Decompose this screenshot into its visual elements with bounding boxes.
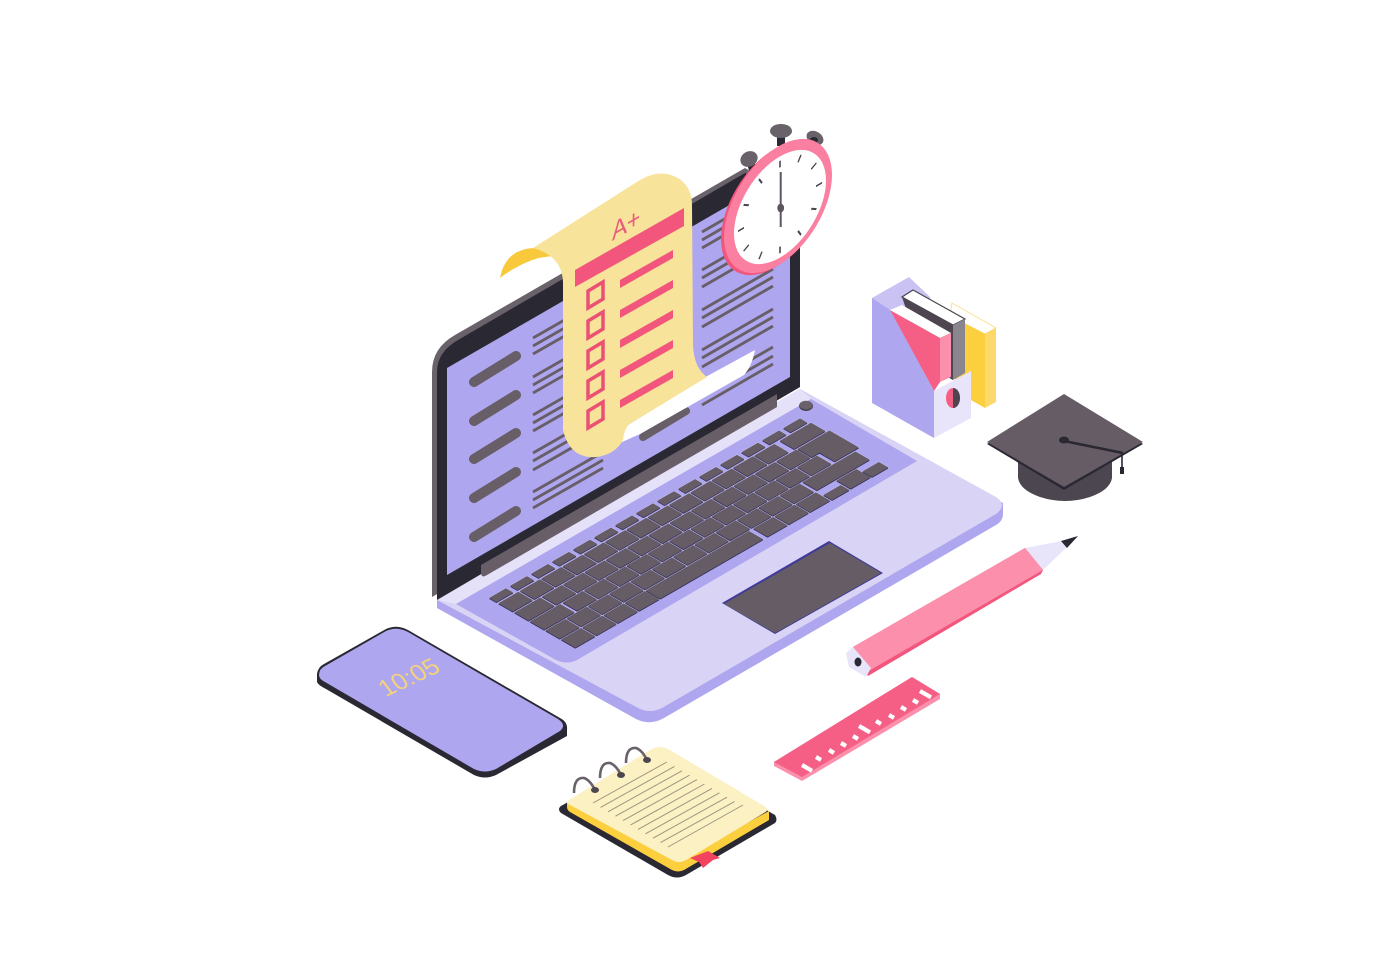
dark book — [902, 290, 965, 380]
pencil end cap — [846, 647, 871, 677]
laptop — [432, 168, 1003, 722]
paper white underside — [620, 350, 755, 443]
answer lines — [620, 250, 673, 408]
laptop hinge — [481, 394, 777, 576]
notebook bookmark — [690, 851, 720, 868]
stopwatch face — [734, 130, 826, 284]
laptop screen — [447, 170, 790, 575]
screen pills — [474, 356, 686, 537]
yellow book — [950, 303, 996, 408]
paper header bar — [575, 208, 684, 287]
file front panel — [934, 371, 971, 438]
cap skull — [1018, 440, 1112, 501]
touchpad — [722, 541, 883, 634]
notebook lines — [593, 762, 743, 847]
phone time: 10:05 — [373, 653, 446, 702]
smartphone — [317, 627, 567, 778]
notebook page edge — [567, 802, 769, 872]
file hole — [946, 388, 960, 408]
stopwatch body — [721, 117, 829, 299]
notebook cover — [559, 750, 776, 878]
screen text lines — [533, 191, 773, 508]
graduation cap — [987, 394, 1143, 501]
paper sheet — [533, 173, 707, 457]
pink book — [890, 305, 951, 391]
paper curl — [500, 248, 556, 278]
notebook — [559, 747, 776, 878]
cap tassel — [1059, 436, 1124, 474]
cap board — [987, 397, 1143, 490]
notebook page — [567, 747, 767, 862]
stopwatch hand — [777, 172, 784, 227]
pencil — [846, 536, 1078, 677]
pencil body — [853, 548, 1043, 676]
magazine file with books — [872, 277, 996, 438]
laptop lid — [432, 168, 800, 600]
grade: A+ — [612, 201, 640, 247]
pencil lead — [1061, 536, 1078, 548]
keyboard — [489, 416, 891, 648]
phone screen — [319, 629, 563, 772]
checkboxes — [588, 282, 603, 428]
ruler — [774, 677, 940, 781]
stopwatch buttons — [737, 124, 826, 174]
ruler marks — [802, 691, 931, 771]
phone body — [317, 627, 567, 778]
power button — [799, 401, 813, 411]
file back — [872, 277, 945, 380]
exam paper — [500, 173, 755, 457]
laptop base — [437, 389, 1003, 722]
file side panel — [872, 298, 934, 438]
notebook rings — [574, 748, 651, 793]
stopwatch — [721, 115, 832, 299]
pencil wood tip — [1025, 541, 1067, 570]
